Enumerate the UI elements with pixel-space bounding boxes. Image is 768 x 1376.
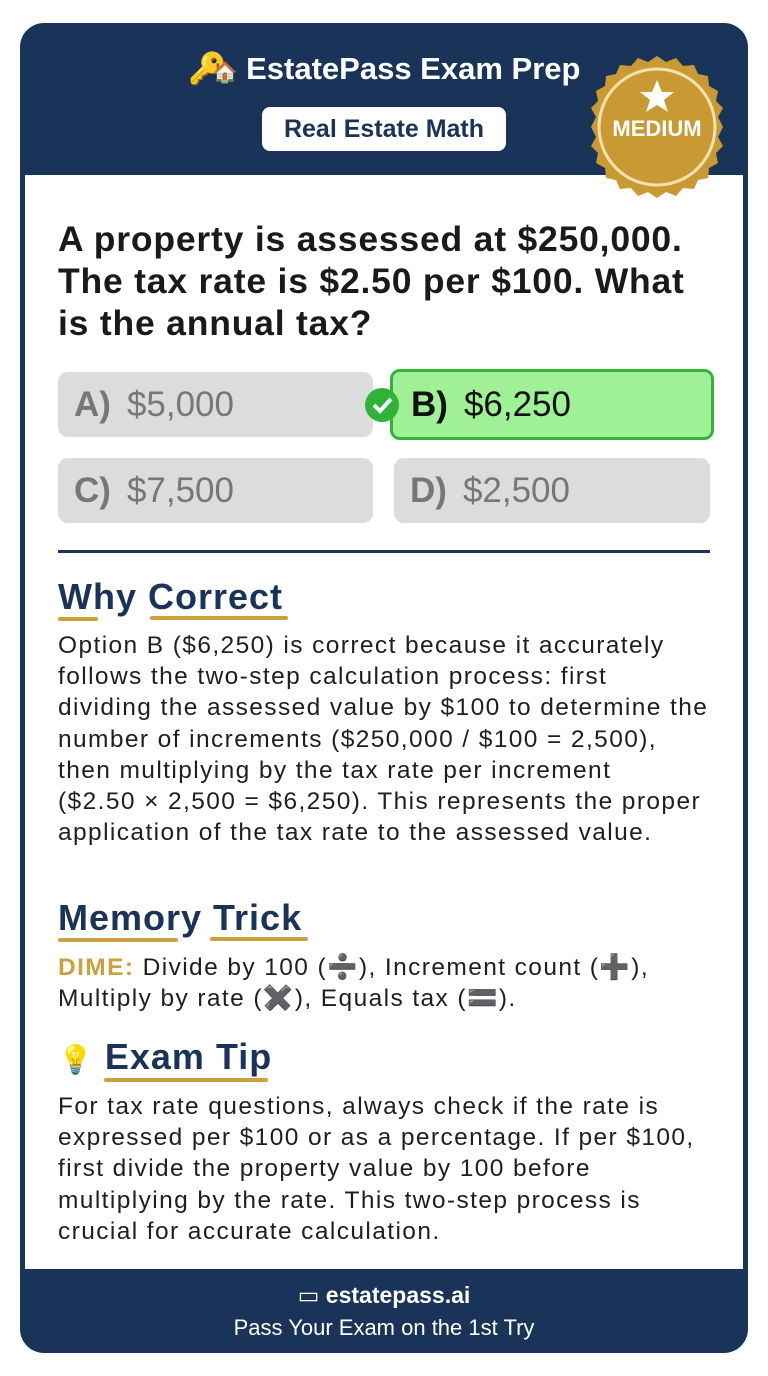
category pill [262,107,506,151]
question: A property is assessed at $250,000. [58,219,683,259]
memory trick text [58,953,649,1012]
why correct text: application of the tax rate to the assessed value. [58,819,652,846]
why correct text: then multiplying by the tax rate per increment [58,757,611,784]
exam tip text: expressed per $100 or as a percentage. If per $100, [58,1124,695,1151]
footer tagline: Pass Your Exam on the 1st Try [234,1315,534,1340]
option D: D) [410,470,447,510]
question [58,219,685,343]
option B correct: B) [411,384,448,424]
question: is the annual tax? [58,303,372,343]
why correct text: ($2.50 × 2,500 = $6,250). This represents the proper [58,788,701,815]
heading: Memory Trick: Memory Trick [58,897,302,938]
option D: $2,500 [463,470,570,510]
option C: C) [74,470,111,510]
content panel [25,175,743,1269]
option B correct: $6,250 [464,384,571,424]
footer [234,1282,534,1340]
memory trick text: DIME: Divide by 100 (➗), Increment count (➕), [58,954,649,981]
option A [58,372,373,437]
exam tip text: multiplying by the rate. This two-step process is [58,1187,641,1214]
why correct text: follows the two-step calculation process: first [58,663,607,690]
option C [58,458,373,523]
icon: check [365,388,399,422]
option C: $7,500 [127,470,234,510]
exam tip text: first divide the property value by 100 before [58,1155,591,1182]
heading: Exam Tip: 💡 Exam Tip [58,1036,272,1077]
why correct text: number of increments ($250,000 / $100 = 2,500), [58,726,657,753]
why correct text: Option B ($6,250) is correct because it accurately [58,632,665,659]
option B correct [390,369,714,440]
why correct text [58,632,708,846]
header title: 🔑🏠 EstatePass Exam Prep [188,51,580,86]
question: The tax rate is $2.50 per $100. What [58,261,685,301]
exam tip text: For tax rate questions, always check if the rate is [58,1093,659,1120]
option D [394,458,710,523]
difficulty badge [591,56,723,198]
footer site: ▭ estatepass.ai [298,1282,470,1308]
why correct text: dividing the assessed value by $100 to determine the [58,694,708,721]
option A: A) [74,384,111,424]
exam tip text [58,1093,695,1245]
exam tip text: crucial for accurate calculation. [58,1218,441,1245]
category pill: Real Estate Math [284,115,484,143]
memory trick text: Multiply by rate (✖️), Equals tax (🟰). [58,985,517,1012]
option A: $5,000 [127,384,234,424]
difficulty badge: MEDIUM [612,116,702,141]
heading: Why Correct: Why Correct [58,576,283,617]
